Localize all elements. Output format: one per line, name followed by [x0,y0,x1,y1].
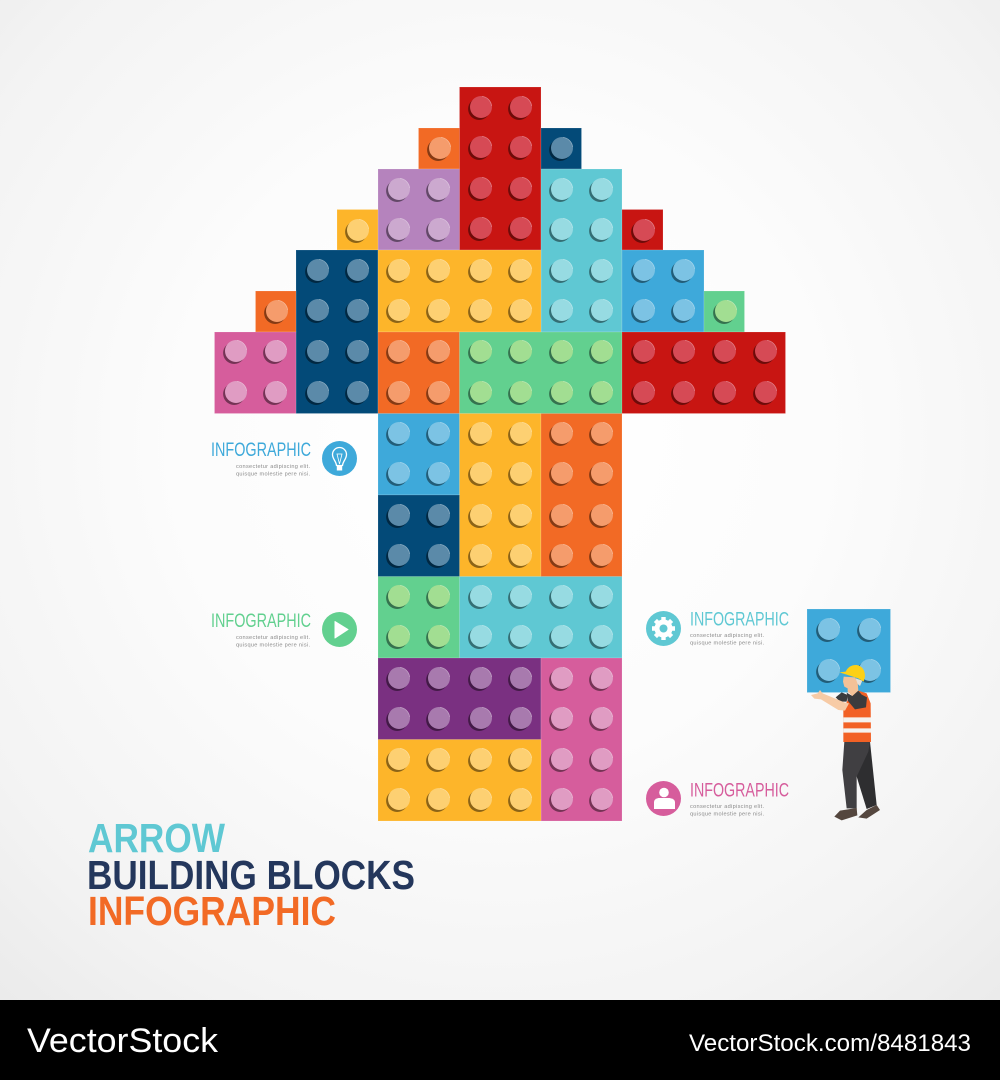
callout body text: quisque molestie pere nisi. [236,472,310,478]
collar and sleeve [847,690,867,709]
callout body text: consectetur adipiscing elit. [236,635,310,641]
callout body text [690,633,764,646]
callout body text: quisque molestie pere nisi. [236,642,310,648]
callout: blue lightbulb [211,440,357,478]
block: blue right [622,250,704,332]
block: top red [460,87,541,250]
carried blue block [807,609,890,692]
block: pink shaft [541,658,622,821]
title line: building blocks: BUILDING BLOCKS [87,852,415,898]
icon: light bulb [322,441,357,476]
block: red wide [622,332,786,414]
worker arm and hand [811,690,849,711]
vest stripes [843,717,871,733]
callout body text [236,635,310,648]
shoes [834,805,880,820]
callout body text: quisque molestie pere nisi. [690,640,764,646]
callout heading: INFOGRAPHIC [211,611,311,632]
back leg [856,742,877,809]
block: orange centre [378,332,460,414]
icon: person [646,781,681,816]
block: teal shaft [460,576,622,658]
callout heading: INFOGRAPHIC [211,440,311,461]
block: orange single [418,128,460,169]
block: red single [622,210,663,250]
callout body text: consectetur adipiscing elit. [690,633,764,639]
callout body text: consectetur adipiscing elit. [690,804,764,810]
callout body text: consectetur adipiscing elit. [236,464,310,470]
title line: arrow: ARROW [88,815,225,861]
block: pink left [214,332,296,414]
block: green right single [704,291,744,332]
block: navy left [296,250,378,414]
worker head [843,677,858,696]
block: lilac [378,169,460,250]
title [87,815,415,934]
callout body text [236,464,310,478]
worker upper body [811,665,871,742]
callout heading: INFOGRAPHIC [690,610,789,630]
block: purple shaft [378,658,541,740]
title line: infographic: INFOGRAPHIC [88,888,336,934]
block: green wide [460,332,622,414]
block: navy single [541,128,582,169]
callout heading: INFOGRAPHIC [690,780,789,802]
block: teal upper [541,169,622,332]
callout: green play [211,611,357,648]
arrow made of building blocks [214,87,786,821]
far shoulder [836,692,848,702]
block: yellow base [378,740,541,821]
worker helmet [839,665,865,682]
icon: gear [646,611,681,646]
block: yellow shaft [460,414,541,576]
callout body text [690,804,764,818]
block: yellow single [337,210,378,250]
block: blue shaft [378,414,460,495]
callout body text: quisque molestie pere nisi. [690,812,764,818]
callout: pink person [646,780,789,818]
callout: teal gear [646,610,789,646]
construction worker [811,665,880,820]
front leg [842,742,870,808]
block: green shaft [378,576,460,658]
block: yellow wide [378,250,541,332]
icon: play [322,612,357,647]
block: navy shaft [378,495,460,576]
worker lower body [834,742,880,820]
worker hair [856,678,862,686]
watermark bar [0,1000,1000,1080]
block: orange shaft [541,414,622,576]
watermark url: VectorStock.com/8481843 [689,1030,971,1057]
worker vest [843,691,871,742]
watermark logo text: VectorStock [27,1022,219,1060]
block: orange left single [256,291,296,332]
